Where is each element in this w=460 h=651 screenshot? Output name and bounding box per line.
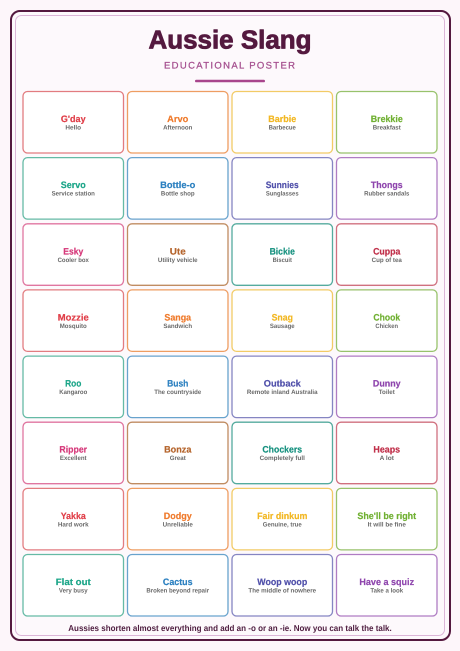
- card: Esky: [23, 224, 124, 285]
- card: Cactus: Broken beyond repair: [146, 588, 210, 594]
- card: Flat out: Very busy: [59, 588, 88, 594]
- card: Chockers: [232, 422, 332, 484]
- card: Bottle-o: Bottle-o: [160, 180, 196, 190]
- card: She'll be right: It will be fine: [368, 521, 406, 528]
- card: Sanga: [128, 290, 228, 351]
- card: Brekkie: Breakfast: [373, 124, 402, 132]
- card: Thongs: Thongs: [371, 180, 403, 190]
- card: Sanga: Sandwich: [163, 323, 192, 330]
- card: Chook: [336, 290, 437, 351]
- card: Servo: [23, 158, 124, 219]
- card: Roo: Roo: [65, 379, 82, 389]
- card: Have a squiz: Take a look: [370, 588, 404, 594]
- card: Arvo: Afternoon: [163, 124, 193, 132]
- card: Ripper: Excellent: [60, 455, 87, 462]
- title underline: [195, 80, 265, 82]
- card: Brekkie: Brekkie: [371, 114, 403, 124]
- card: Fair dinkum: Fair dinkum: [257, 511, 307, 521]
- title: Aussie Slang: [148, 24, 312, 54]
- card: Cactus: Cactus: [163, 577, 193, 587]
- card: Bush: Bush: [167, 379, 189, 389]
- card: Chook: Chook: [373, 312, 401, 322]
- card: Have a squiz: [336, 554, 437, 616]
- card: Snag: [232, 290, 332, 351]
- card: Bonza: [128, 422, 228, 484]
- card: Ripper: Ripper: [59, 445, 87, 455]
- card: Barbie: Barbie: [268, 114, 296, 124]
- card: Snag: Sausage: [270, 323, 295, 330]
- card: Flat out: Flat out: [56, 577, 91, 587]
- card: Mozzie: Mozzie: [58, 312, 89, 322]
- card: Bush: The countryside: [154, 389, 202, 396]
- card: Have a squiz: Have a squiz: [359, 577, 414, 587]
- card: Dunny: Dunny: [373, 379, 401, 389]
- card: Roo: Kangaroo: [59, 389, 87, 396]
- card: Ute: Utility vehicle: [158, 257, 198, 264]
- card: She'll be right: [336, 488, 437, 550]
- card: Bickie: [232, 224, 332, 285]
- card: Servo: Servo: [61, 180, 86, 190]
- card: Roo: [23, 356, 124, 418]
- card: Mozzie: [23, 290, 124, 351]
- card: Esky: Esky: [63, 246, 84, 256]
- card: Bickie: Biscuit: [273, 257, 293, 264]
- card: Ute: Ute: [170, 246, 186, 256]
- card: G'day: G'day: [61, 114, 86, 124]
- card: Bonza: Bonza: [164, 445, 192, 455]
- card: Sanga: Sanga: [164, 312, 192, 322]
- card: Bickie: Bickie: [270, 246, 295, 256]
- card: G'day: Hello: [65, 124, 81, 132]
- card: Flat out: [23, 554, 124, 616]
- card: Cuppa: Cuppa: [373, 246, 401, 256]
- card: Sunnies: [232, 158, 332, 219]
- card: Bottle-o: [128, 158, 228, 219]
- card: Sunnies: Sunglasses: [266, 191, 299, 198]
- card: Chockers: Chockers: [262, 445, 302, 455]
- card: Ute: [128, 224, 228, 285]
- card: Mozzie: Mosquito: [60, 323, 87, 330]
- card: Yakka: Yakka: [61, 511, 87, 521]
- card: Fair dinkum: [232, 488, 332, 550]
- card: Heaps: A lot: [380, 455, 395, 462]
- card: Heaps: [336, 422, 437, 484]
- card: Chook: Chicken: [375, 323, 398, 330]
- subtitle: EDUCATIONAL POSTER: [164, 60, 295, 71]
- card: Outback: [232, 356, 332, 418]
- card: Chockers: Completely full: [260, 455, 305, 462]
- card: Brekkie: [336, 92, 437, 153]
- card: Dunny: [336, 356, 437, 418]
- card: Arvo: [128, 92, 228, 153]
- card: Dunny: Toilet: [379, 389, 396, 396]
- card: Cactus: [128, 554, 228, 616]
- card: She'll be right: She'll be right: [357, 511, 416, 521]
- card: Woop woop: [232, 554, 332, 616]
- card: Esky: Cooler box: [58, 257, 89, 264]
- card: Thongs: Rubber sandals: [364, 191, 410, 198]
- card: Woop woop: Woop woop: [257, 577, 308, 587]
- card: Fair dinkum: Genuine, true: [263, 521, 302, 528]
- card: Dodgy: Dodgy: [164, 511, 193, 521]
- card: Sunnies: Sunnies: [266, 180, 299, 190]
- card: Barbie: Barbecue: [269, 124, 296, 132]
- card: Barbie: [232, 92, 332, 153]
- card: Bonza: Great: [170, 455, 187, 462]
- card: Bottle-o: Bottle shop: [161, 191, 195, 198]
- card: Yakka: [23, 488, 124, 550]
- card: Heaps: Heaps: [373, 445, 400, 455]
- card: Servo: Service station: [52, 191, 95, 198]
- card: Arvo: Arvo: [167, 114, 189, 124]
- card: Dodgy: Unreliable: [163, 521, 193, 528]
- footer note: Aussies shorten almost everything and add an -o or an -ie. Now you can talk the talk.: [68, 623, 392, 633]
- card: Yakka: Hard work: [58, 521, 89, 528]
- card: Outback: Remote inland Australia: [247, 389, 318, 396]
- card: Woop woop: The middle of nowhere: [248, 588, 317, 594]
- card: Bush: [128, 356, 228, 418]
- card: Outback: Outback: [264, 379, 302, 389]
- card: Dodgy: [128, 488, 228, 550]
- card: Cuppa: Cup of tea: [372, 257, 402, 264]
- card: Cuppa: [336, 224, 437, 285]
- card: Snag: Snag: [272, 312, 293, 322]
- card: G'day: [23, 92, 124, 153]
- card: Ripper: [23, 422, 124, 484]
- card: Thongs: [336, 158, 437, 219]
